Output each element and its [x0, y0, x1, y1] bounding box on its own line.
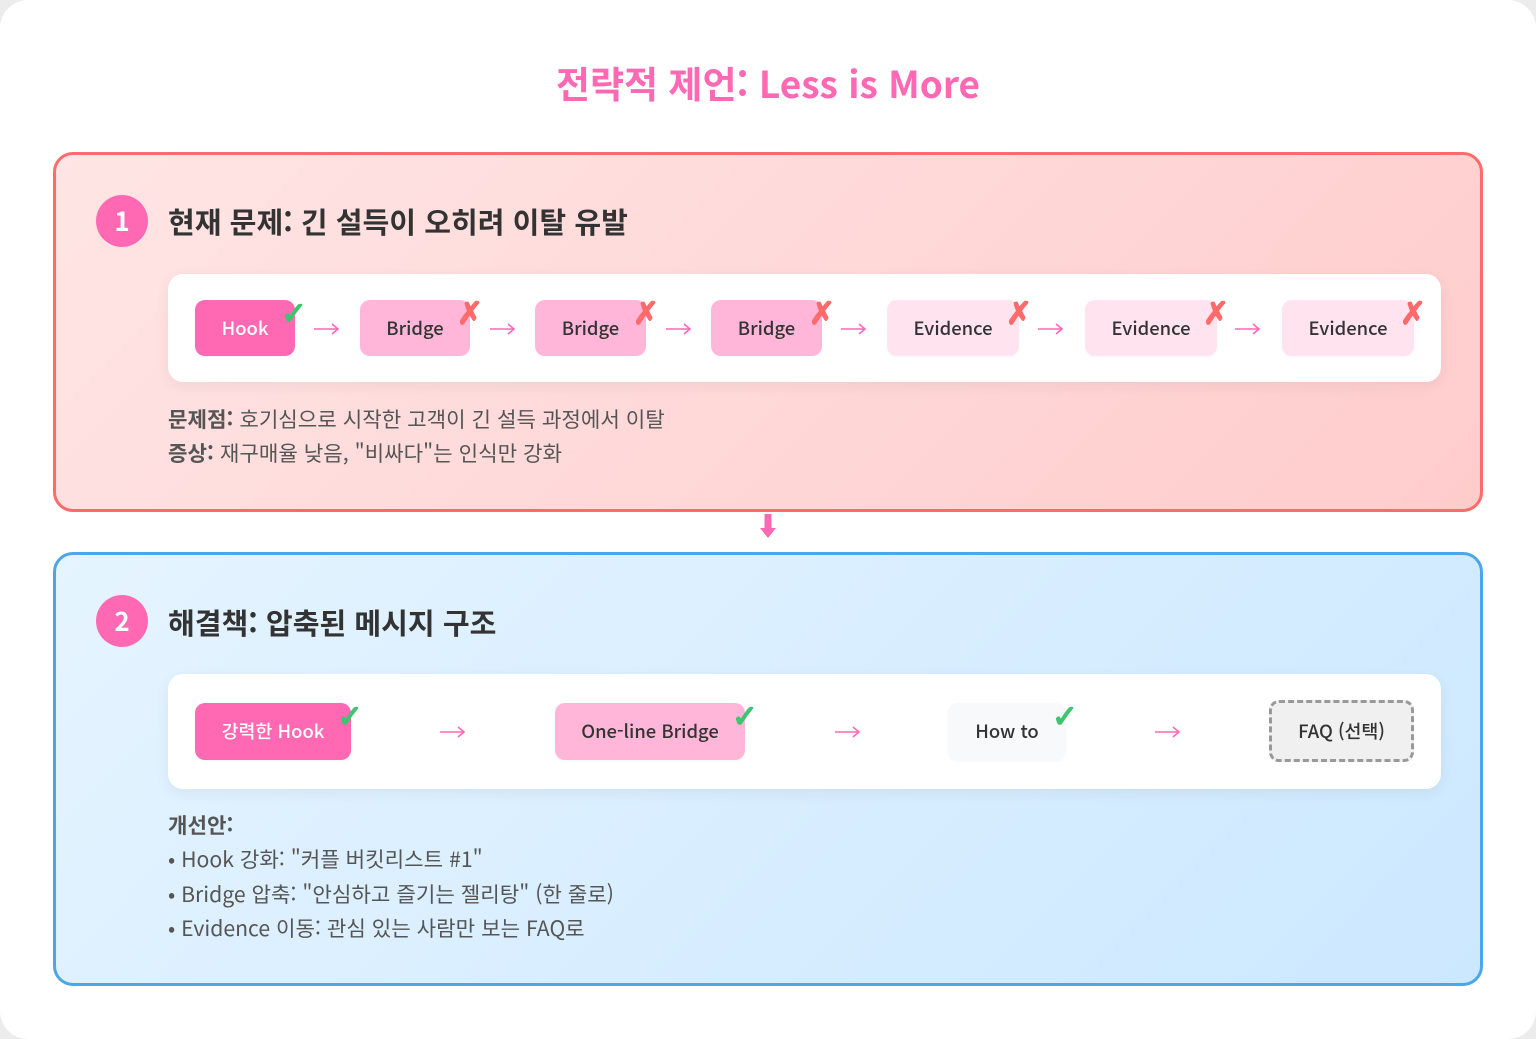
improvement list: • Hook 강화: "커플 버킷리스트 #1"	[168, 843, 483, 874]
icon: check: ✓	[337, 699, 363, 735]
arrow	[1155, 726, 1180, 738]
step: Bridge 3	[711, 300, 822, 356]
panel: solution	[53, 552, 1483, 986]
arrow	[1038, 324, 1064, 334]
step: How to	[948, 703, 1066, 760]
arrow: problem to solution	[760, 514, 776, 538]
title: 전략적 제언: Less is More	[556, 55, 980, 109]
step: Evidence 3: Evidence	[1308, 315, 1388, 341]
improvement list: 개선안:	[168, 809, 233, 840]
step number 1	[96, 195, 148, 247]
arrow	[314, 324, 340, 334]
icon: cross: ✗	[1203, 296, 1229, 332]
icon: cross: ✗	[633, 296, 659, 332]
icon: cross: ✗	[809, 296, 835, 332]
step: Bridge 1: Bridge	[386, 315, 444, 341]
step: Bridge 2: Bridge	[562, 315, 619, 341]
arrow	[490, 324, 516, 334]
step number 2: 2	[114, 602, 130, 639]
step number 2	[96, 595, 148, 647]
icon: check: ✓	[1052, 699, 1078, 735]
step: Evidence 1	[887, 300, 1019, 356]
arrow	[841, 324, 866, 334]
panel: current problem	[53, 152, 1483, 512]
arrow	[666, 324, 692, 334]
icon: check: ✓	[732, 699, 758, 735]
step: One-line Bridge: One-line Bridge	[581, 718, 719, 744]
arrow	[440, 726, 466, 738]
step: Bridge 2	[535, 300, 646, 356]
step: One-line Bridge	[555, 703, 745, 760]
step: Evidence 3	[1282, 300, 1414, 356]
step: Hook: Hook	[222, 315, 268, 341]
step: Bridge 1	[360, 300, 470, 356]
problem description: 문제점: 호기심으로 시작한 고객이 긴 설득 과정에서 이탈	[168, 403, 665, 434]
step: Evidence 2	[1085, 300, 1217, 356]
step: Bridge 3: Bridge	[738, 315, 795, 341]
problem description: 증상: 재구매율 낮음, "비싸다"는 인식만 강화	[168, 437, 562, 468]
step number 1: 1	[114, 202, 130, 239]
problem description	[168, 403, 665, 468]
step: Hook	[195, 300, 295, 356]
flow row: current structure	[168, 274, 1441, 382]
heading: current problem: 현재 문제: 긴 설득이 오히려 이탈 유발	[168, 200, 628, 242]
step: strong Hook	[195, 703, 351, 760]
improvement list	[168, 809, 614, 943]
arrow	[1235, 324, 1260, 334]
icon: cross: ✗	[1006, 296, 1032, 332]
step: FAQ optional	[1269, 700, 1414, 762]
step: How to: How to	[975, 718, 1039, 744]
flow row: proposed structure	[168, 674, 1441, 789]
improvement list: • Bridge 압축: "안심하고 즐기는 젤리탕" (한 줄로)	[168, 878, 614, 909]
step: Evidence 1: Evidence	[913, 315, 993, 341]
arrow	[835, 726, 860, 738]
improvement list: • Evidence 이동: 관심 있는 사람만 보는 FAQ로	[168, 912, 585, 943]
icon: cross: ✗	[457, 296, 483, 332]
icon: cross: ✗	[1400, 296, 1426, 332]
step: strong Hook: 강력한 Hook	[222, 718, 324, 744]
icon: check: ✓	[281, 296, 307, 332]
step: Evidence 2: Evidence	[1111, 315, 1191, 341]
step: FAQ optional: FAQ (선택)	[1298, 718, 1385, 744]
heading: solution: 해결책: 압축된 메시지 구조	[168, 601, 496, 643]
